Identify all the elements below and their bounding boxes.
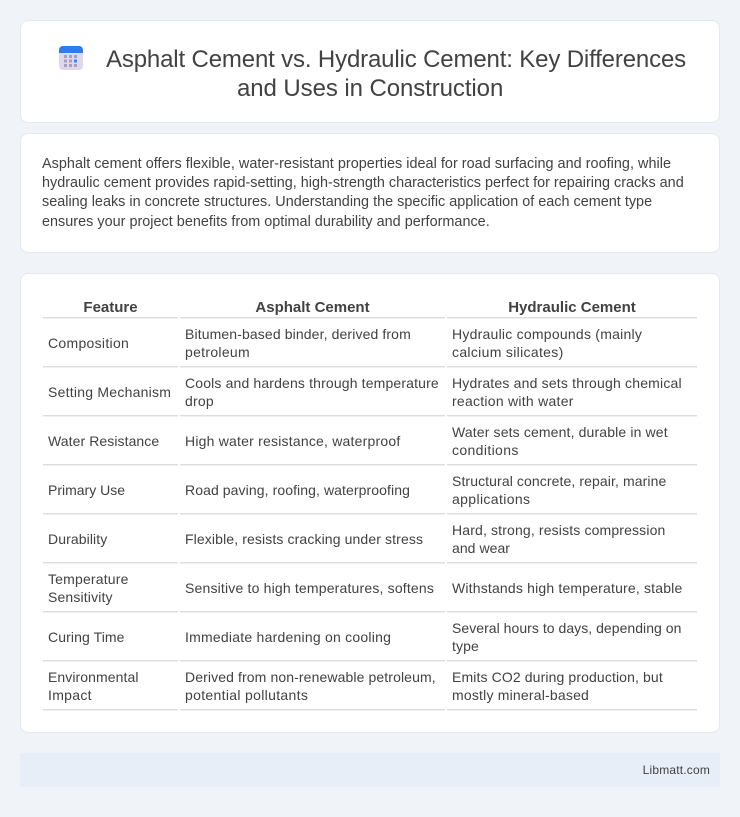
- panel: intro text card: [20, 133, 720, 253]
- table header: Hydraulic Cement: [508, 299, 636, 316]
- row: setting mechanism: [43, 375, 697, 417]
- row: composition: petroleum: [185, 344, 250, 360]
- row: temperature sensitivity: Sensitivity: [48, 589, 113, 605]
- text block: intro: hydraulic cement provides rapid-setting, high-strength characteristics perfect for repairing cracks and: [42, 175, 684, 191]
- row: environmental impact: Impact: [48, 687, 92, 703]
- row: environmental impact: Environmental: [48, 669, 139, 685]
- row: setting mechanism: Cools and hardens through temperature: [185, 375, 439, 391]
- text block: intro: [42, 156, 684, 230]
- row: environmental impact: Emits CO2 during production, but: [452, 669, 663, 685]
- row: setting mechanism: Hydrates and sets through chemical: [452, 375, 682, 391]
- row: environmental impact: Derived from non-renewable petroleum,: [185, 669, 436, 685]
- row: environmental impact: potential pollutants: [185, 687, 308, 703]
- row: durability: [43, 522, 697, 564]
- row: water resistance: Water Resistance: [48, 433, 159, 449]
- row: setting mechanism: Setting Mechanism: [48, 384, 171, 400]
- table header: Feature: [83, 299, 138, 316]
- heading: title: Asphalt Cement vs. Hydraulic Cement: Key Differences: [106, 46, 686, 73]
- row: temperature sensitivity: Withstands high temperature, stable: [452, 580, 682, 596]
- row: primary use: Road paving, roofing, waterproofing: [185, 482, 410, 498]
- row: water resistance: Water sets cement, durable in wet: [452, 424, 668, 440]
- table header: [43, 299, 697, 319]
- row: water resistance: conditions: [452, 442, 519, 458]
- footer: Libmatt.com: [643, 763, 710, 777]
- row: primary use: applications: [452, 491, 530, 507]
- icon: calendar: [59, 46, 83, 70]
- row: durability: Durability: [48, 531, 107, 547]
- row: composition: Composition: [48, 335, 129, 351]
- row: environmental impact: mostly mineral-based: [452, 687, 589, 703]
- row: primary use: Primary Use: [48, 482, 125, 498]
- row: water resistance: [43, 424, 697, 466]
- row: primary use: [43, 473, 697, 515]
- row: curing time: Several hours to days, depending on: [452, 620, 681, 636]
- row: durability: Hard, strong, resists compression: [452, 522, 665, 538]
- row: curing time: Curing Time: [48, 629, 125, 645]
- row: composition: Bitumen-based binder, derived from: [185, 326, 411, 342]
- row: curing time: type: [452, 638, 479, 654]
- panel: comparison table card: [20, 273, 720, 733]
- row: composition: calcium silicates): [452, 344, 564, 360]
- row: temperature sensitivity: [43, 571, 697, 613]
- row: curing time: Immediate hardening on cooling: [185, 629, 391, 645]
- row: setting mechanism: drop: [185, 393, 214, 409]
- row: environmental impact: [43, 669, 697, 711]
- row: composition: [43, 326, 697, 368]
- text block: intro: sealing leaks in concrete structures. Understanding the specific application of each cement type: [42, 194, 652, 210]
- row: durability: Flexible, resists cracking under stress: [185, 531, 423, 547]
- row: composition: Hydraulic compounds (mainly: [452, 326, 642, 342]
- text block: intro: ensures your project benefits from optimal durability and performance.: [42, 214, 490, 230]
- row: durability: and wear: [452, 540, 510, 556]
- row: primary use: Structural concrete, repair, marine: [452, 473, 666, 489]
- panel: title card: [20, 20, 720, 123]
- row: temperature sensitivity: Sensitive to high temperatures, softens: [185, 580, 434, 596]
- heading: title: and Uses in Construction: [237, 75, 503, 102]
- row: curing time: [43, 620, 697, 662]
- row: water resistance: High water resistance, waterproof: [185, 433, 400, 449]
- table header: Asphalt Cement: [255, 299, 370, 316]
- footer: [20, 753, 720, 787]
- row: temperature sensitivity: Temperature: [48, 571, 129, 587]
- heading: title: [106, 46, 686, 102]
- row: setting mechanism: reaction with water: [452, 393, 574, 409]
- text block: intro: Asphalt cement offers flexible, water-resistant properties ideal for road surfacing and roofing, while: [42, 156, 671, 172]
